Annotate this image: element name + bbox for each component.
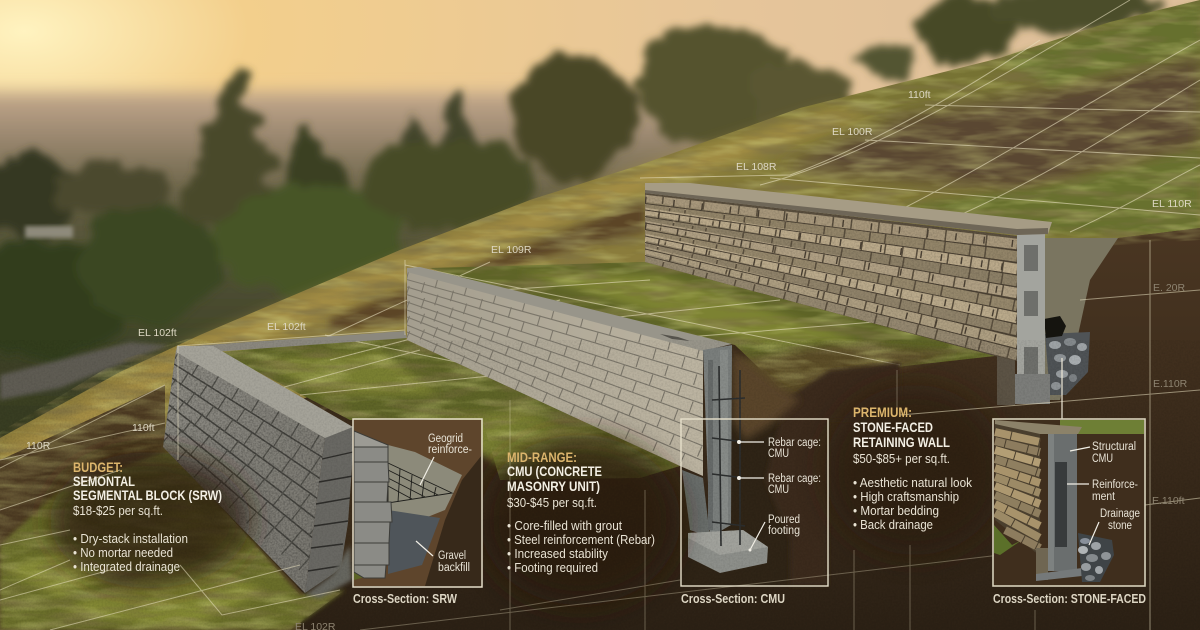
label: structural CMU: Structural — [1092, 441, 1136, 453]
lower stone courses — [997, 352, 1015, 405]
stacked block section — [354, 431, 392, 578]
base — [1036, 568, 1082, 581]
bullets: • No mortar needed — [73, 546, 173, 560]
leaders: stone inset — [1067, 447, 1099, 545]
text block: mid-range — [507, 449, 655, 575]
label: drainage stone: Drainage — [1100, 508, 1140, 520]
wall end face — [305, 427, 353, 593]
label: rebar cage 1: CMU — [768, 448, 789, 460]
bullets: • High craftsmanship — [853, 490, 959, 504]
inset grass tuft — [354, 572, 362, 580]
dark gravel — [388, 510, 440, 574]
label: rebar cage 1: Rebar cage: — [768, 437, 821, 449]
label: footing: Poured — [768, 514, 800, 526]
leaders: rebar — [739, 442, 765, 550]
elevation labels: EL 109R — [491, 244, 532, 256]
label: reinforcement: ment — [1092, 491, 1116, 503]
name: RETAINING WALL — [853, 434, 950, 450]
column face — [703, 345, 732, 537]
elevation contour lines over soil — [0, 240, 1200, 630]
bullets: • Core-filled with grout — [507, 519, 622, 533]
bullets: • Mortar bedding — [853, 504, 939, 518]
bullets: • Dry-stack installation — [73, 532, 188, 546]
bullets: • Integrated drainage — [73, 560, 180, 574]
drain pipe — [1044, 316, 1066, 338]
stone mortar lines — [645, 204, 1017, 349]
label: geogrid: Geogrid — [428, 433, 463, 445]
premium wall: stone-faced — [645, 183, 1118, 405]
bullets: • Aesthetic natural look — [853, 476, 973, 490]
stone face base — [645, 192, 1017, 361]
stone joints — [645, 200, 1017, 343]
inset frame: cross-section stone-faced — [993, 419, 1145, 587]
wall top edge returning to CMU — [177, 331, 407, 352]
inset frame: cross-section CMU — [681, 419, 828, 586]
label: reinforcement: Reinforce- — [1092, 479, 1138, 491]
leader: gravel — [416, 541, 433, 556]
label: gravel: backfill — [438, 562, 470, 574]
gravel edge at foot of SRW wall — [305, 545, 352, 598]
inset grass — [1060, 419, 1145, 434]
caption: CMU: Cross-Section: CMU — [681, 592, 785, 606]
soil cut, lower right and bottom — [200, 228, 1200, 630]
stone face — [995, 424, 1040, 555]
stone inset cap — [995, 420, 1082, 434]
text block: premium — [853, 404, 973, 532]
brown slope — [0, 385, 305, 630]
price: $18-$25 per sq.ft. — [73, 503, 163, 518]
label: drainage stone: stone — [1108, 520, 1132, 532]
label: footing: footing — [768, 525, 800, 537]
price: $50-$85+ per sq.ft. — [853, 451, 950, 466]
inset soil — [993, 419, 1145, 587]
inset dark soil — [425, 455, 482, 586]
dark backing behind premium text — [825, 385, 1005, 555]
elevation labels: EL 110R — [1152, 198, 1192, 210]
elevation labels: E.110ft — [1152, 495, 1185, 507]
name: MASONRY UNIT) — [507, 478, 600, 494]
caption: SRW: Cross-Section: SRW — [353, 592, 457, 606]
text block: budget — [73, 459, 222, 574]
wall cap with hollow cores — [407, 267, 732, 351]
bullets: • Steel reinforcement (Rebar) — [507, 533, 655, 547]
bullets: • Footing required — [507, 561, 598, 575]
lower stone stack — [1036, 548, 1048, 580]
distant building glimpse — [25, 226, 73, 238]
footing — [688, 530, 768, 573]
inset grass tuft — [994, 525, 1022, 555]
blurred tree line — [0, 0, 1160, 362]
label: gravel: Gravel — [438, 550, 466, 562]
light gravel — [388, 445, 462, 520]
dirt strips — [330, 200, 645, 332]
label: structural CMU: CMU — [1092, 453, 1113, 465]
drainage stones — [1045, 332, 1090, 395]
contour lines on terraces and slopes — [255, 0, 1200, 410]
elevation labels: 110R — [26, 440, 51, 452]
mid-range wall: CMU — [407, 267, 732, 476]
caption: stone-faced: Cross-Section: STONE-FACED — [993, 592, 1146, 606]
dark soil behind column — [681, 350, 828, 586]
bullets: • Back drainage — [853, 518, 933, 532]
wall cap — [176, 346, 353, 438]
geogrid — [388, 463, 452, 503]
drainage stones — [1078, 533, 1114, 582]
budget wall: segmental block — [160, 331, 407, 595]
name: CMU (CONCRETE — [507, 463, 602, 479]
noise overlay on lower scene — [0, 340, 1200, 630]
elevation labels: 110ft — [908, 89, 931, 101]
lower left dark slope and grass — [0, 385, 345, 630]
back gravel fill — [1045, 238, 1118, 400]
brown soil right of column — [765, 362, 900, 586]
elevation labels: EL 108R — [736, 161, 777, 173]
brown mound beside column — [731, 350, 800, 440]
terrace grass between CMU and stone walls — [430, 262, 995, 395]
dark backing behind budget text — [50, 452, 250, 588]
price: $30-$45 per sq.ft. — [507, 495, 597, 510]
rebar — [712, 366, 745, 546]
wall front face — [407, 271, 703, 476]
stone wall cap — [645, 183, 1052, 235]
grass field — [0, 450, 345, 630]
leader: geogrid — [420, 457, 434, 485]
leader from wall to stone inset — [1061, 358, 1063, 419]
name: SEMONTAL — [73, 473, 135, 489]
elevation labels: E.110R — [1153, 378, 1188, 390]
tier label: PREMIUM: — [853, 404, 912, 420]
road at lower left — [0, 342, 170, 400]
elevation labels: 110ft — [132, 422, 155, 434]
golden crest — [0, 110, 880, 480]
tier label: MID-RANGE: — [507, 449, 577, 465]
ground base under the terraces — [0, 228, 1200, 630]
elevation labels: EL 102ft — [138, 327, 177, 339]
inset frame: cross-section SRW — [353, 419, 482, 587]
CMU section — [1054, 434, 1077, 571]
elevation labels: EL 102ft — [267, 321, 306, 333]
label: rebar cage 2: Rebar cage: — [768, 473, 821, 485]
name: STONE-FACED — [853, 419, 933, 435]
leader dots — [737, 440, 752, 552]
label: rebar cage 2: CMU — [768, 484, 789, 496]
CMU column end with rebar (inset area) — [681, 345, 900, 586]
footing — [1013, 374, 1050, 404]
wall front face — [163, 350, 325, 593]
elevation labels: EL 100R — [832, 126, 873, 138]
bullets: • Increased stability — [507, 547, 609, 561]
elevation labels: E. 20R — [1153, 282, 1186, 294]
label: geogrid: reinforce- — [428, 444, 472, 456]
tier label: BUDGET: — [73, 459, 123, 475]
inset soil — [353, 419, 482, 587]
end face courses — [308, 452, 353, 571]
CMU section — [1017, 233, 1045, 383]
darker wall return — [682, 470, 710, 537]
dark backing behind mid-range text — [480, 435, 680, 605]
terrace grass between SRW and CMU walls — [220, 336, 680, 480]
frame — [353, 419, 482, 587]
name: SEGMENTAL BLOCK (SRW) — [73, 487, 222, 503]
forest and haze base — [0, 92, 770, 472]
